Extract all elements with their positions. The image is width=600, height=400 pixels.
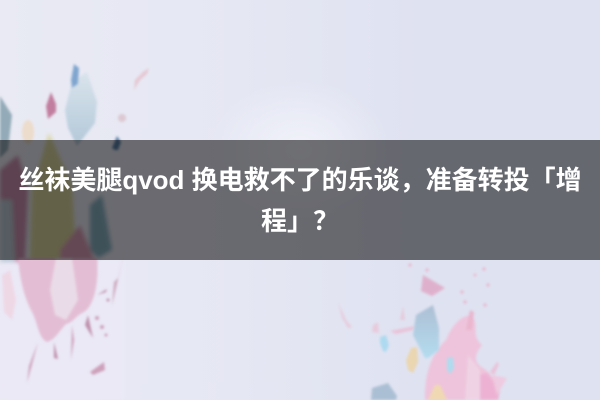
soft glow (210, 80, 390, 220)
lower left light patch (0, 260, 125, 400)
right splash: gems (371, 275, 454, 400)
left splash: pink drips below the bar (2, 244, 126, 383)
dark title band (0, 140, 600, 260)
left splash: gems upper (0, 64, 149, 158)
title: 丝袜美腿qvod 换电救不了的乐谈，准备转投「增程」？ (18, 165, 582, 236)
right splash: pink paint (338, 263, 507, 400)
left splash: large colored shapes behind the bar (0, 133, 112, 262)
